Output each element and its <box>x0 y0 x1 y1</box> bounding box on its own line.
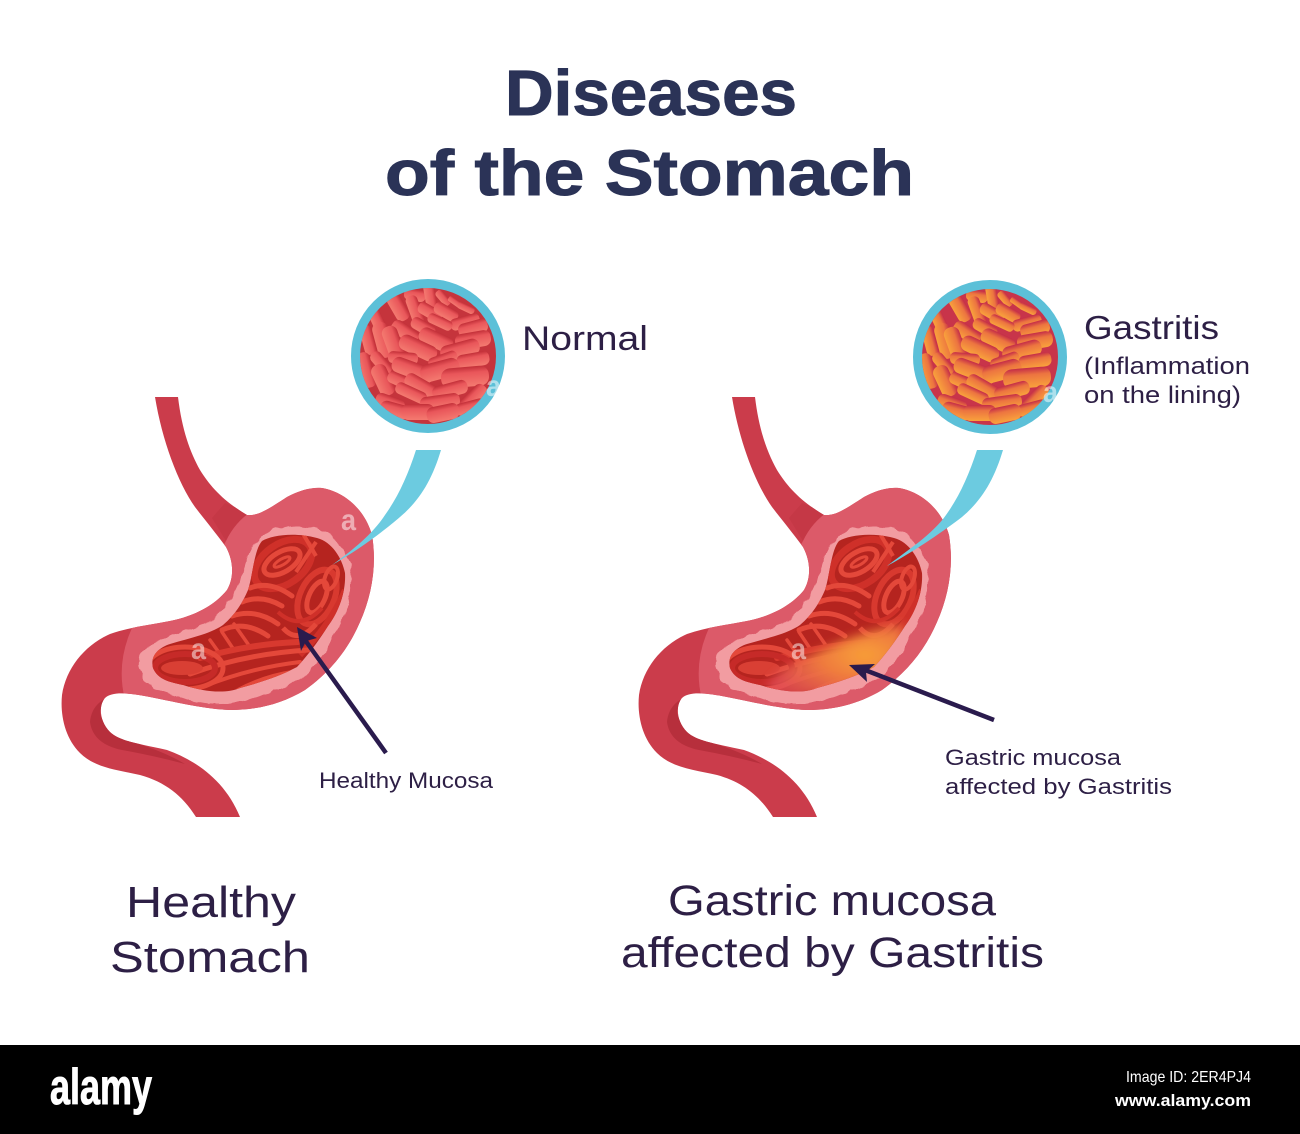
label: gastric mucosa affected: affected by Gastritis <box>945 774 1172 799</box>
label: gastritis with note: (Inflammation <box>1084 353 1250 380</box>
inflamed mucosa area <box>766 624 904 698</box>
watermarks: a <box>486 370 501 403</box>
magnifier: normal mucosa <box>355 282 500 428</box>
label: healthy mucosa: Healthy Mucosa <box>319 768 494 793</box>
pointer: gastritis magnifier tail <box>887 450 1003 566</box>
pointer: healthy magnifier tail <box>332 450 441 565</box>
caption: healthy stomach: Healthy <box>126 878 296 927</box>
watermarks: a <box>191 633 206 666</box>
watermarks <box>191 370 1058 666</box>
watermarks: a <box>341 504 356 537</box>
label: gastritis with note <box>1084 309 1250 409</box>
caption: gastric mucosa affected by gastritis <box>621 877 1044 977</box>
footer logo: alamy <box>50 1059 152 1115</box>
watermarks: a <box>1043 376 1058 409</box>
arrow: healthy mucosa <box>297 627 386 753</box>
caption: gastric mucosa affected by gastritis: affected by Gastritis <box>621 929 1044 977</box>
arrow: gastritis area <box>849 664 994 720</box>
title: of the Stomach <box>385 137 914 209</box>
footer bar <box>0 1045 1300 1134</box>
title <box>385 57 914 209</box>
label: gastric mucosa affected: Gastric mucosa <box>945 745 1122 770</box>
panel: healthy stomach <box>62 397 400 817</box>
magnifier: gastritis mucosa <box>917 283 1062 430</box>
panel: gastritis stomach <box>639 397 977 817</box>
label: gastritis with note: on the lining) <box>1084 382 1241 409</box>
label: gastritis with note: Gastritis <box>1084 309 1219 346</box>
title: Diseases <box>505 57 797 129</box>
watermarks: a <box>791 633 806 666</box>
label: gastric mucosa affected <box>945 745 1172 799</box>
caption: gastric mucosa affected by gastritis: Gastric mucosa <box>668 877 996 925</box>
caption: healthy stomach: Stomach <box>110 933 310 982</box>
stomach illustration: healthy <box>62 397 400 817</box>
footer website: www.alamy.com <box>1114 1091 1251 1110</box>
label: normal: Normal <box>522 320 648 358</box>
caption: healthy stomach <box>110 878 310 982</box>
footer image id: Image ID: 2ER4PJ4 <box>1126 1069 1251 1086</box>
